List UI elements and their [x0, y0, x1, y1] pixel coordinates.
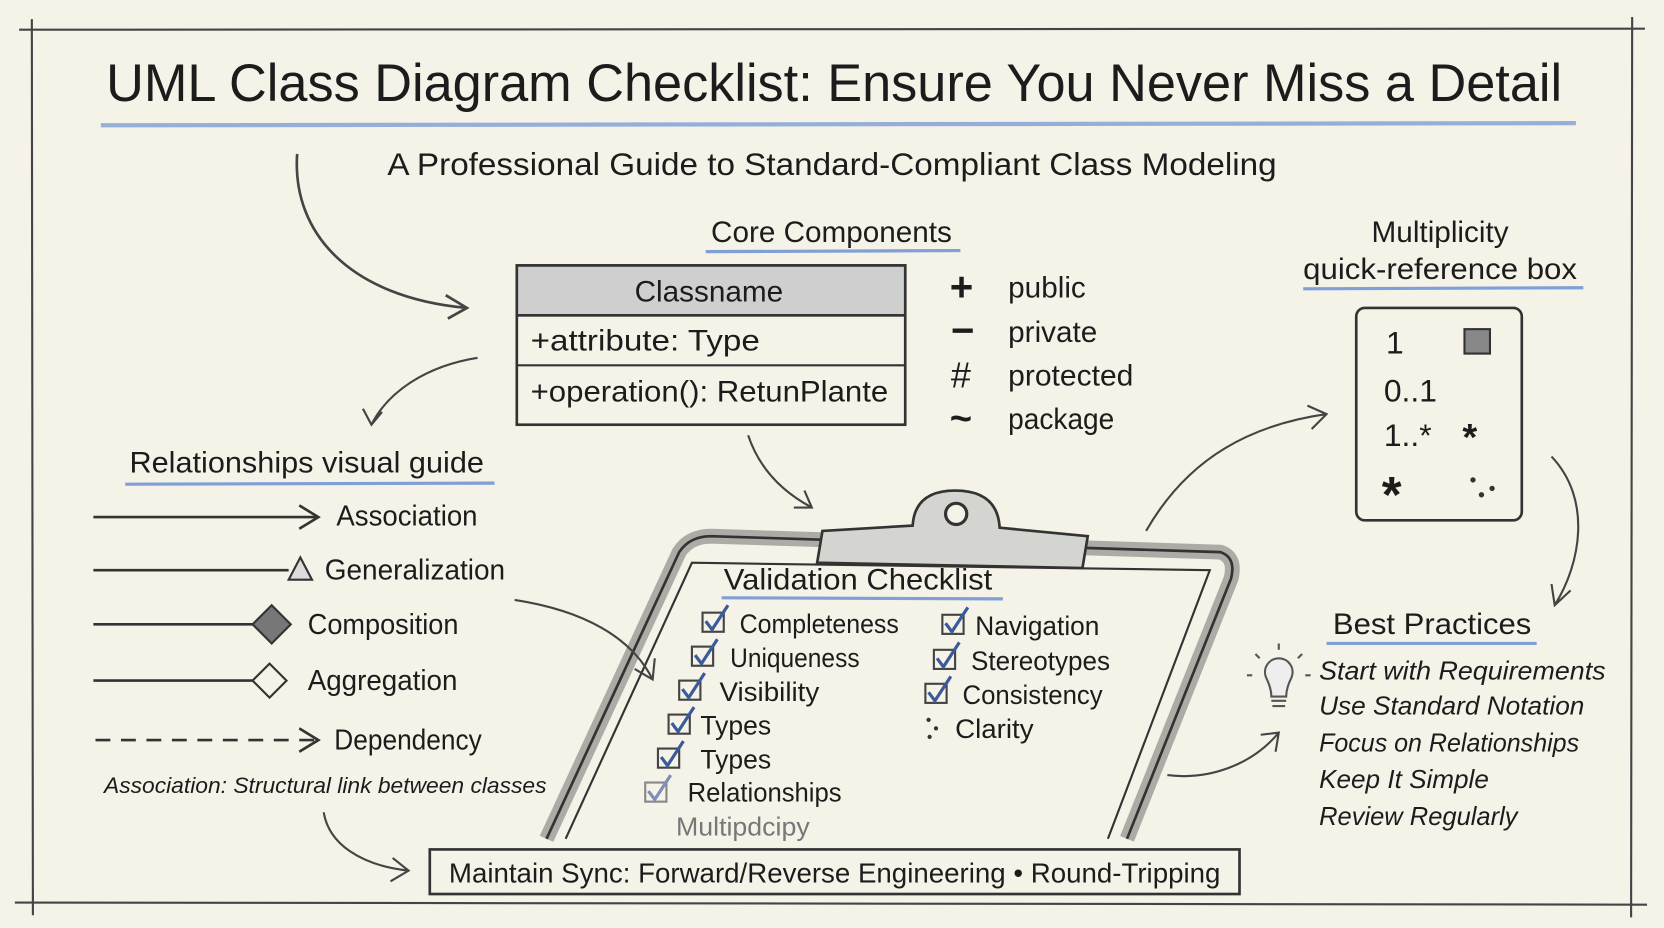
- checklist items: Multipdcipy: [676, 814, 810, 842]
- checklist items: Completeness: [740, 609, 899, 639]
- relationship: aggregation: Aggregation: [308, 665, 457, 697]
- relationship: composition: [93, 605, 458, 643]
- arrow: clipboard to best practices: [1167, 733, 1279, 776]
- heading: relationships: Relationships visual guide: [129, 446, 484, 479]
- relationship: dependency: Dependency: [334, 725, 482, 757]
- checklist items: Types: [700, 745, 771, 775]
- checklist items: Relationships: [688, 778, 842, 808]
- relationship: generalization: Generalization: [325, 555, 505, 587]
- icon: lightbulb: [1247, 643, 1311, 706]
- heading: multiplicity: [1303, 216, 1583, 289]
- relationship: association: Association: [336, 501, 478, 533]
- multiplicity box: 1: [1386, 325, 1404, 361]
- checklist items: Uniqueness: [730, 643, 860, 673]
- multiplicity box: 0..1: [1384, 372, 1437, 408]
- heading: validation checklist: Validation Checklist: [724, 563, 993, 596]
- visibility legend: private: [1008, 316, 1097, 349]
- visibility legend: +: [950, 263, 973, 309]
- multiplicity box: 1..*: [1384, 417, 1432, 453]
- best practices list: Use Standard Notation: [1319, 693, 1584, 721]
- class box: Classname: [635, 276, 783, 309]
- visibility legend: [950, 263, 1133, 440]
- arrow: title to class: [297, 154, 467, 319]
- arrow: relationships to clipboard: [515, 600, 655, 680]
- multiplicity box: [1356, 308, 1522, 523]
- heading: core components: Core Components: [711, 216, 952, 249]
- sync box: [430, 849, 1240, 894]
- arrow: clipboard to multiplicity: [1146, 406, 1327, 531]
- visibility legend: ~: [950, 397, 972, 440]
- relationship: aggregation: [93, 664, 457, 698]
- checklist items: Consistency: [963, 680, 1103, 710]
- note: association: Association: Structural link between classes: [102, 773, 547, 798]
- subtitle: A Professional Guide to Standard-Compliant Class Modeling: [387, 146, 1277, 182]
- visibility legend: protected: [1008, 359, 1133, 392]
- sync box: Maintain Sync: Forward/Reverse Engineering • Round-Tripping: [449, 857, 1220, 888]
- best practices list: Keep It Simple: [1319, 766, 1489, 794]
- arrow: note to sync: [324, 812, 409, 881]
- clip: [817, 491, 1088, 568]
- class box: +attribute: Type: [531, 324, 760, 357]
- best practices list: Focus on Relationships: [1319, 730, 1579, 758]
- visibility legend: package: [1008, 403, 1114, 436]
- multiplicity box: *: [1382, 466, 1402, 523]
- relationship: association: [93, 501, 478, 533]
- checklist items: [645, 605, 1110, 842]
- arrow: class to relationships: [363, 358, 478, 425]
- checklist items: Stereotypes: [971, 646, 1110, 676]
- multiplicity box: *: [1462, 416, 1477, 459]
- visibility legend: −: [951, 307, 974, 353]
- class box: +operation(): RetunPlante: [531, 375, 888, 408]
- arrow: class to clipboard: [748, 435, 812, 508]
- visibility legend: public: [1008, 271, 1086, 304]
- relationship: generalization: [93, 555, 505, 587]
- best practices list: [1319, 658, 1606, 831]
- visibility legend: #: [951, 355, 971, 396]
- checklist items: Visibility: [720, 677, 820, 707]
- checklist items: Types: [700, 711, 771, 741]
- checklist items: Clarity: [955, 714, 1034, 744]
- relationship: dependency: [96, 725, 482, 757]
- relationship: composition: Composition: [308, 609, 458, 641]
- heading: multiplicity: Multiplicity: [1372, 216, 1509, 249]
- class box: [517, 265, 905, 425]
- best practices list: Review Regularly: [1319, 803, 1520, 831]
- heading: best practices: Best Practices: [1333, 608, 1531, 641]
- clipboard: [547, 491, 1232, 839]
- heading: multiplicity: quick-reference box: [1303, 253, 1577, 286]
- checklist items: Navigation: [975, 611, 1099, 641]
- title: UML Class Diagram Checklist: Ensure You Never Miss a Detail: [106, 54, 1562, 113]
- arrow: multiplicity to best practices: [1552, 457, 1578, 605]
- best practices list: Start with Requirements: [1319, 658, 1606, 686]
